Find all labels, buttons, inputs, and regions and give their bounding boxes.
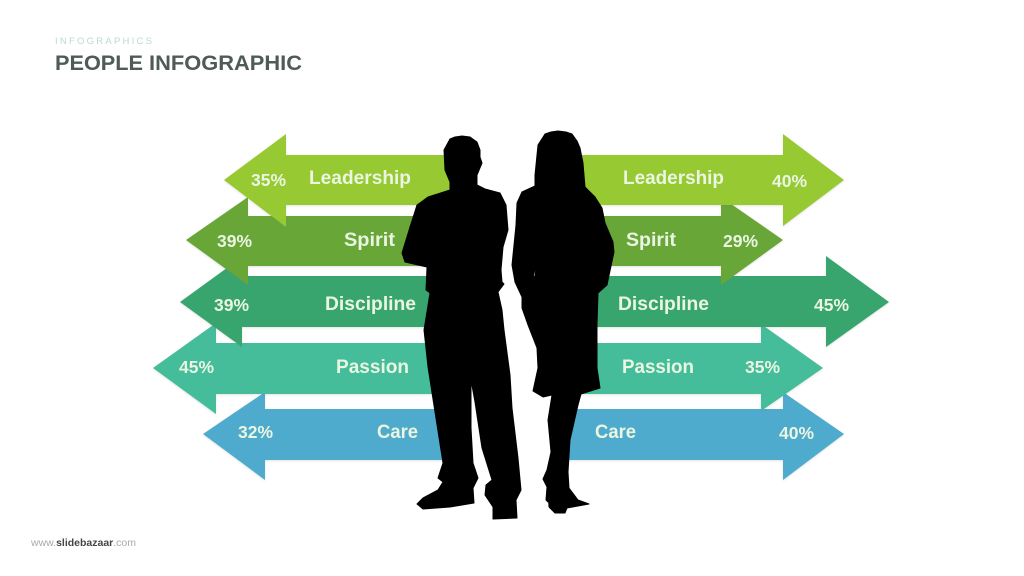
right arrow: care [560, 392, 844, 480]
right arrow: spirit: Spirit [626, 230, 677, 251]
left arrow: leadership [224, 134, 460, 227]
left arrow: discipline: Discipline [325, 294, 416, 315]
title: PEOPLE [55, 51, 143, 75]
right arrow: leadership: Leadership [623, 168, 724, 189]
left arrow: leadership: Leadership [309, 168, 411, 189]
left arrow: care: Care [377, 422, 418, 443]
right arrow: discipline: 45% [814, 295, 849, 315]
left arrow: care [203, 392, 450, 480]
title: INFOGRAPHIC [149, 51, 302, 75]
left arrow: discipline: 39% [214, 295, 249, 315]
right arrow: leadership [565, 134, 844, 226]
left arrow: leadership: 35% [251, 170, 286, 190]
footer website: www.slidebazaar.com [30, 537, 136, 549]
silhouette: man [402, 136, 521, 519]
left arrow: passion [153, 323, 450, 414]
right arrow: spirit [580, 197, 783, 285]
right arrow: discipline [575, 256, 889, 347]
right arrows group [560, 134, 889, 480]
left arrow: passion: 45% [179, 357, 214, 377]
silhouette: woman [512, 131, 614, 513]
left arrow: spirit: Spirit [344, 230, 396, 251]
right arrow: care: Care [595, 422, 636, 443]
title [55, 51, 302, 75]
right arrow: passion: 35% [745, 357, 780, 377]
right arrow: passion: Passion [622, 357, 694, 378]
left arrow: discipline [180, 257, 450, 347]
right arrow: leadership: 40% [772, 171, 807, 191]
left arrow: spirit: 39% [217, 231, 252, 251]
right arrow: discipline: Discipline [618, 294, 709, 315]
right arrow: spirit: 29% [723, 231, 758, 251]
right arrow: care: 40% [779, 423, 814, 443]
right arrow: passion [570, 324, 823, 411]
left arrow: care: 32% [238, 422, 273, 442]
left arrow: spirit [186, 197, 440, 285]
left arrows group [153, 134, 460, 480]
left arrow: passion: Passion [336, 357, 409, 378]
eyebrow label: INFOGRAPHICS [55, 36, 152, 47]
